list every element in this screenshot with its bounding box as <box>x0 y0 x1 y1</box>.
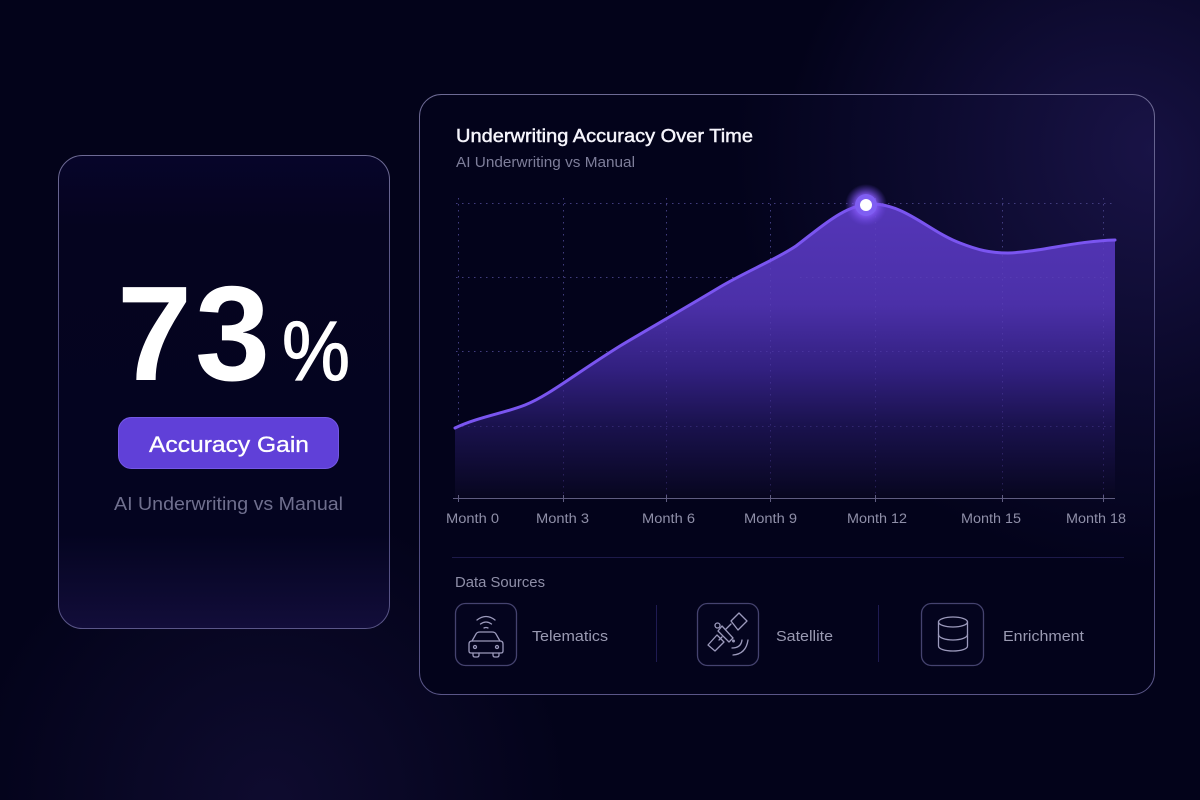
big number 73%: 73 <box>117 258 270 409</box>
x axis labels: Month 6 <box>642 511 695 526</box>
label: telematics: Telematics <box>532 628 608 645</box>
data source: enrichment <box>922 604 1085 666</box>
icon: database <box>922 604 984 666</box>
trend line <box>455 204 1115 428</box>
x axis labels: Month 0 <box>446 511 499 526</box>
big number 73% <box>117 258 350 409</box>
icon: connected car <box>456 604 516 666</box>
data sources heading: Data Sources <box>455 575 545 591</box>
panel: accuracy chart <box>420 94 1154 694</box>
x axis <box>453 495 1115 502</box>
data source: telematics <box>456 604 608 666</box>
icon: satellite <box>698 604 758 666</box>
x axis labels: Month 18 <box>1066 511 1126 526</box>
grid lines over area <box>456 210 1112 498</box>
area line chart <box>446 184 1126 526</box>
data source: satellite <box>698 604 833 666</box>
x axis labels: Month 15 <box>961 511 1021 526</box>
x axis labels <box>446 511 1126 526</box>
area fill <box>455 204 1115 498</box>
chart heading: Underwriting Accuracy Over Time <box>456 125 753 146</box>
x axis labels: Month 9 <box>744 511 797 526</box>
subtitle: AI Underwriting vs Manual <box>114 493 343 514</box>
big number 73%: % <box>282 304 350 398</box>
peak marker <box>845 184 887 226</box>
x axis labels: Month 3 <box>536 511 589 526</box>
chart subheading: AI Underwriting vs Manual <box>456 155 635 171</box>
label: satellite: Satellite <box>776 628 833 645</box>
x axis labels: Month 12 <box>847 511 907 526</box>
panel: accuracy gain stat <box>58 156 390 628</box>
badge: Accuracy Gain: Accuracy Gain <box>149 432 309 457</box>
badge: Accuracy Gain <box>118 418 338 468</box>
label: enrichment: Enrichment <box>1003 628 1085 645</box>
